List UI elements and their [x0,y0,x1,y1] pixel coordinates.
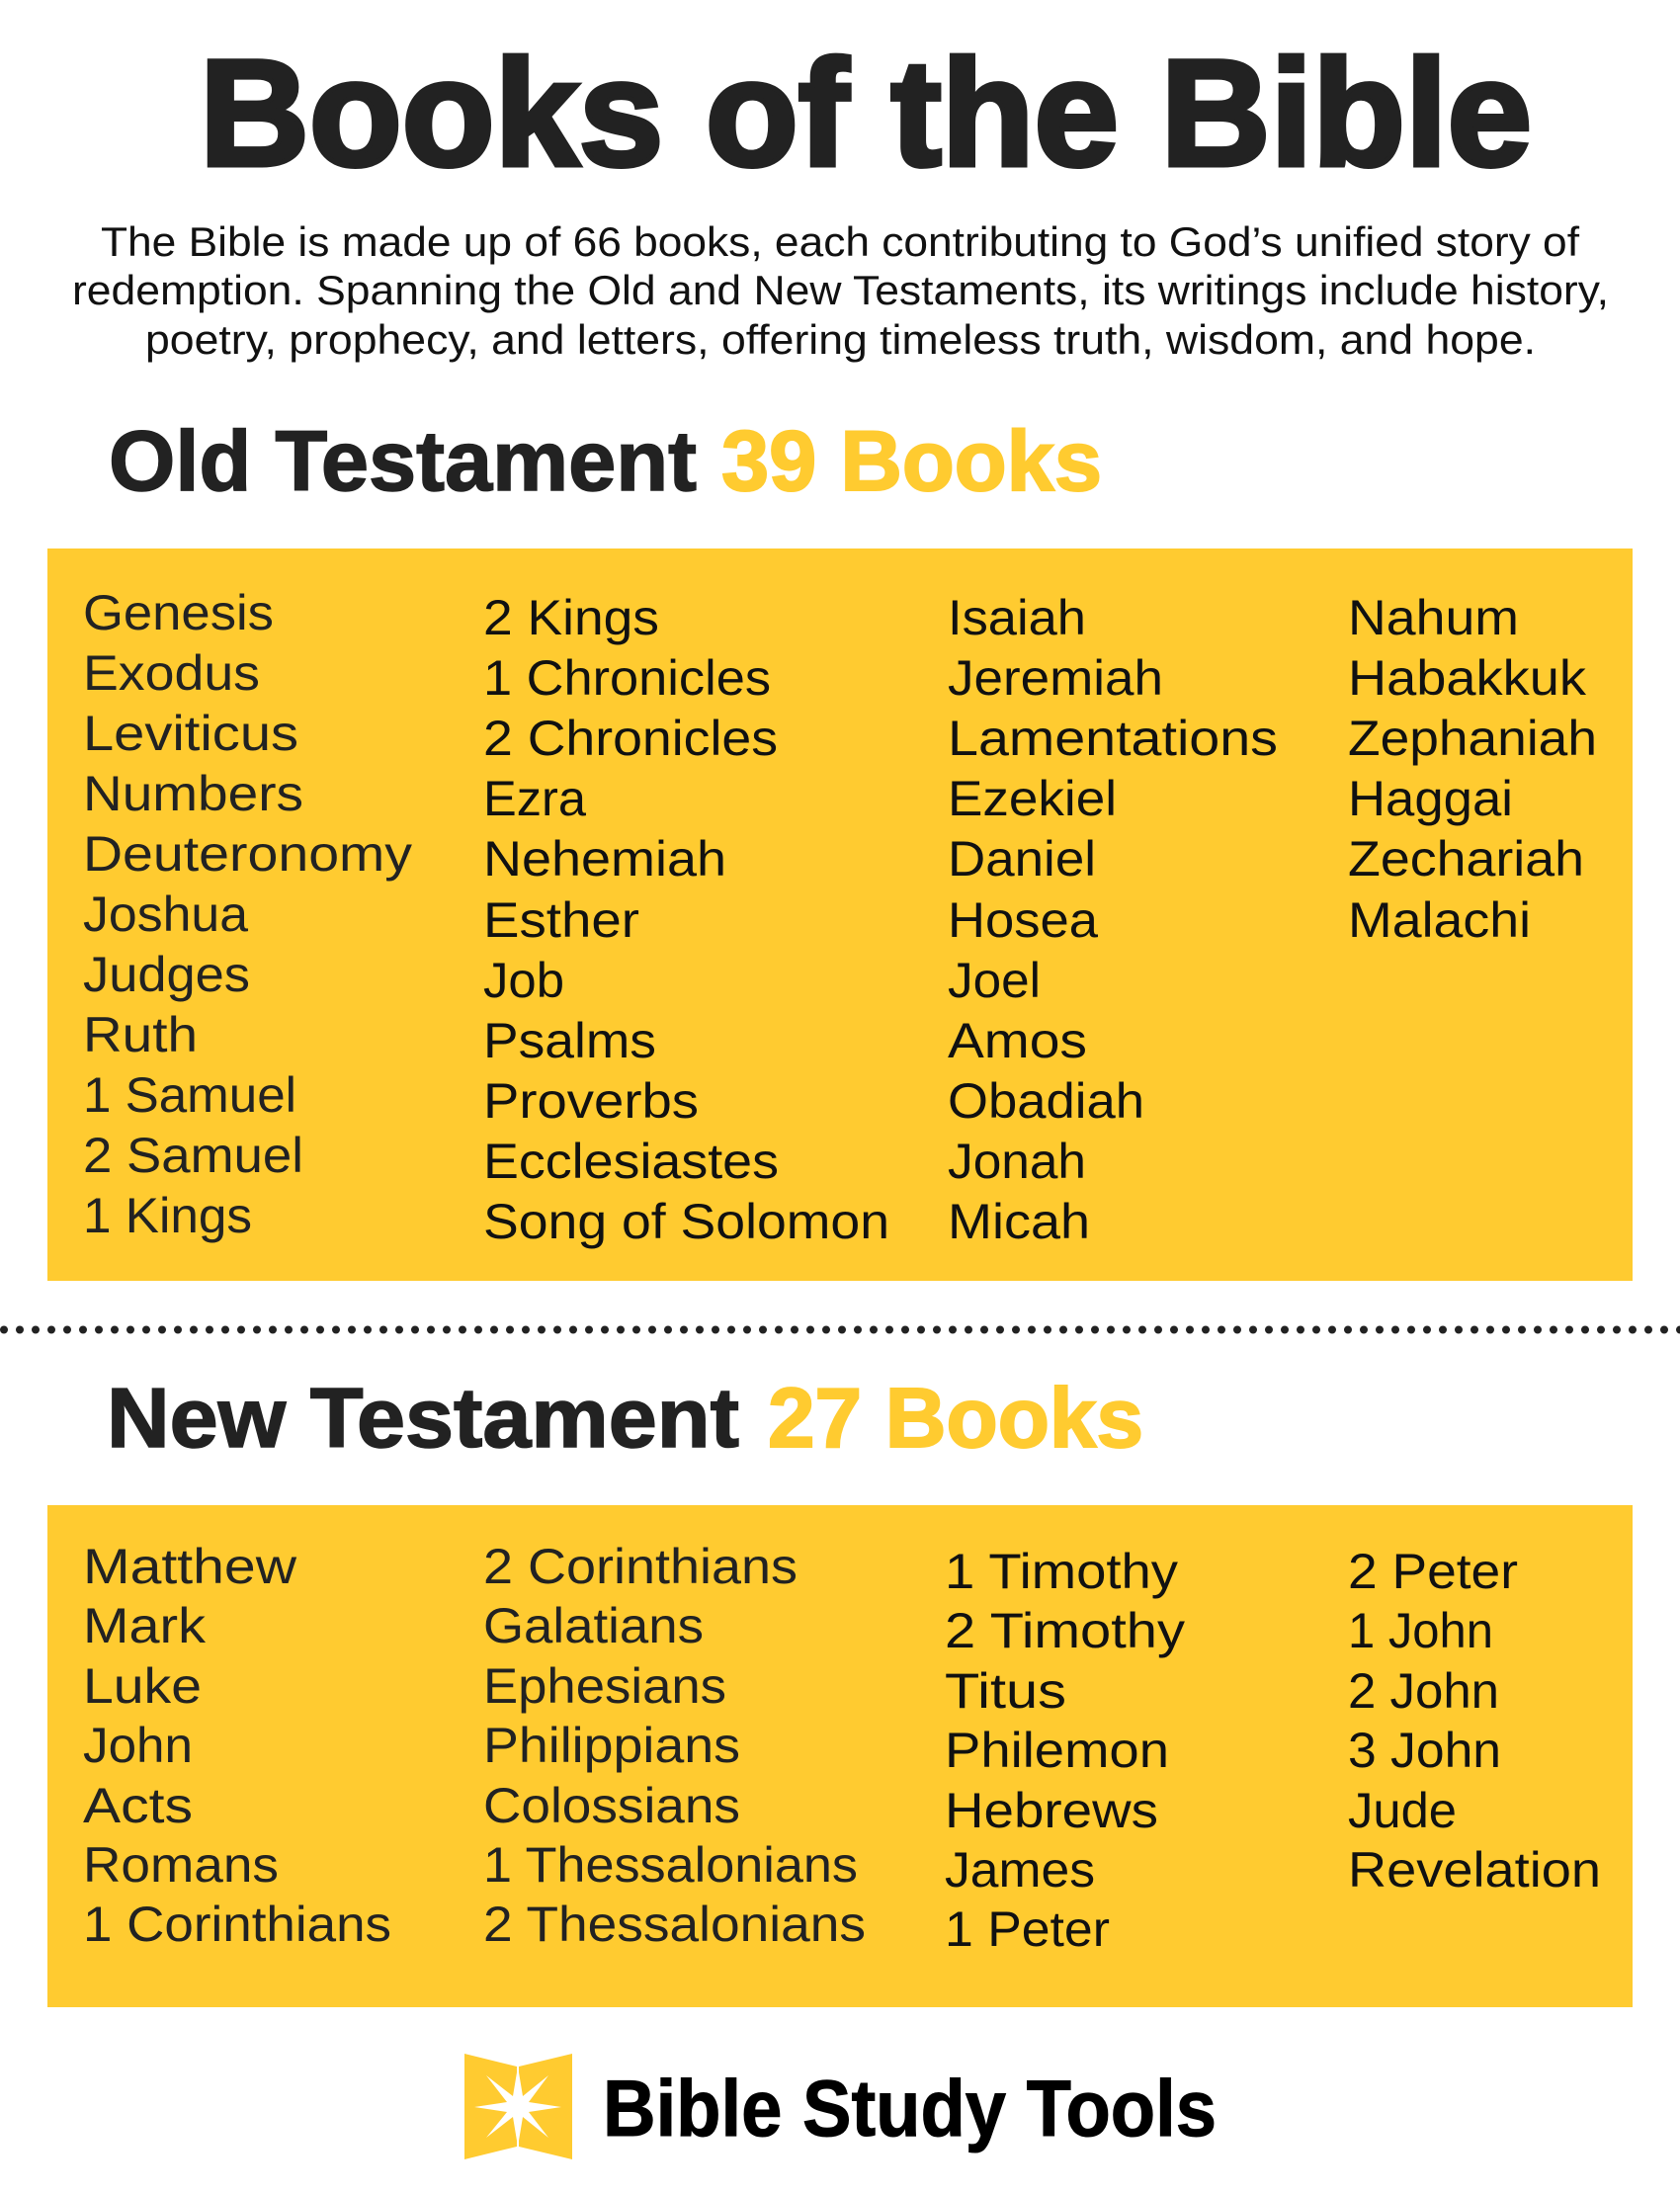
column: 2 Corinthians to 2 Thessalonians: 2 Corinthians [483,1539,798,1594]
column: Isaiah to Micah: Daniel [948,831,1096,886]
heading: Old Testament 39 Books [109,414,1102,509]
column: 1 Timothy to 1 Peter [945,1544,1185,1957]
column: Genesis to 1 Kings [83,585,412,1243]
heading: New Testament 27 Books: New Testament [107,1372,739,1466]
column: 2 Kings to Song of Solomon: Job [483,953,564,1008]
column: 2 Kings to Song of Solomon: Song of Solomon [483,1194,889,1249]
column: 1 Timothy to 1 Peter: Titus [945,1663,1066,1719]
column: 2 Peter to Revelation: 1 John [1348,1603,1493,1658]
column: Isaiah to Micah: Obadiah [948,1073,1144,1129]
column: 2 Peter to Revelation: 2 John [1348,1663,1499,1719]
column: Matthew to 1 Corinthians: Acts [83,1778,193,1833]
column: 2 Peter to Revelation: 2 Peter [1348,1544,1518,1599]
column: 2 Corinthians to 2 Thessalonians [483,1539,866,1952]
title: Books of the Bible [200,29,1532,198]
column: Genesis to 1 Kings: Numbers [83,766,303,821]
column: 2 Kings to Song of Solomon: Psalms [483,1013,656,1068]
column: 2 Kings to Song of Solomon: Ecclesiastes [483,1134,779,1189]
column: Isaiah to Micah: Hosea [948,892,1098,948]
column: Nahum to Malachi: Habakkuk [1348,650,1587,706]
column: Matthew to 1 Corinthians: Luke [83,1658,202,1714]
column: Genesis to 1 Kings: Leviticus [83,706,298,761]
column: Genesis to 1 Kings: Deuteronomy [83,826,412,882]
column: 2 Kings to Song of Solomon: Proverbs [483,1073,699,1129]
column: 2 Corinthians to 2 Thessalonians: Colossians [483,1778,740,1833]
column: Isaiah to Micah: Joel [948,953,1041,1008]
column: Isaiah to Micah [948,590,1278,1249]
column: Matthew to 1 Corinthians: Romans [83,1837,279,1893]
column: Nahum to Malachi: Malachi [1348,892,1531,948]
column: 2 Corinthians to 2 Thessalonians: 1 Thessalonians [483,1837,858,1893]
heading: New Testament 27 Books [107,1372,1143,1466]
column: 1 Timothy to 1 Peter: 2 Timothy [945,1603,1185,1658]
heading: New Testament 27 Books: 27 Books [768,1372,1143,1466]
panel: New Testament books [47,1505,1633,2007]
column: Genesis to 1 Kings: Joshua [83,886,248,942]
column: 2 Corinthians to 2 Thessalonians: 2 Thessalonians [483,1897,866,1952]
column: Nahum to Malachi: Zechariah [1348,831,1584,886]
column: Isaiah to Micah: Amos [948,1013,1087,1068]
column: 1 Timothy to 1 Peter: James [945,1842,1095,1898]
column: Genesis to 1 Kings: 1 Samuel [83,1067,296,1123]
column: Genesis to 1 Kings: Judges [83,947,250,1002]
column: 2 Peter to Revelation: Revelation [1348,1842,1601,1898]
column: Isaiah to Micah: Isaiah [948,590,1086,645]
icon: open book with star [464,2054,572,2159]
column: 2 Kings to Song of Solomon: Esther [483,892,639,948]
column: Matthew to 1 Corinthians: Mark [83,1598,207,1653]
column: 2 Kings to Song of Solomon: 1 Chronicles [483,650,771,706]
logo wordmark: Bible Study Tools [603,2065,1217,2153]
column: Genesis to 1 Kings: Ruth [83,1007,198,1062]
column: 1 Timothy to 1 Peter: 1 Timothy [945,1544,1178,1599]
intro text block: poetry, prophecy, and letters, offering timeless truth, wisdom, and hope. [145,316,1536,363]
column: 2 Kings to Song of Solomon: Nehemiah [483,831,726,886]
column: 2 Corinthians to 2 Thessalonians: Galatians [483,1598,704,1653]
column: Matthew to 1 Corinthians: 1 Corinthians [83,1897,391,1952]
column: 2 Peter to Revelation: Jude [1348,1783,1457,1838]
column: Matthew to 1 Corinthians: John [83,1718,193,1773]
column: 2 Kings to Song of Solomon [483,590,889,1249]
column: 2 Corinthians to 2 Thessalonians: Philippians [483,1718,740,1773]
column: 1 Timothy to 1 Peter: Hebrews [945,1783,1158,1838]
column: Genesis to 1 Kings: Exodus [83,645,260,701]
column: Genesis to 1 Kings: 2 Samuel [83,1128,303,1183]
column: Isaiah to Micah: Jonah [948,1134,1086,1189]
column: 2 Peter to Revelation: 3 John [1348,1723,1501,1778]
column: Matthew to 1 Corinthians [83,1539,391,1952]
column: 1 Timothy to 1 Peter: 1 Peter [945,1901,1110,1957]
heading: Old Testament 39 Books: Old Testament [109,414,697,509]
intro text block [72,218,1609,363]
column: 2 Kings to Song of Solomon: Ezra [483,771,586,826]
heading: Old Testament 39 Books: 39 Books [721,414,1102,509]
column: Nahum to Malachi: Zephaniah [1348,711,1597,766]
column: 2 Peter to Revelation [1348,1544,1601,1898]
column: Isaiah to Micah: Micah [948,1194,1090,1249]
column: Isaiah to Micah: Ezekiel [948,771,1117,826]
column: Genesis to 1 Kings: Genesis [83,585,274,640]
intro text block: The Bible is made up of 66 books, each contributing to God’s unified story of [101,218,1579,265]
column: 1 Timothy to 1 Peter: Philemon [945,1723,1169,1778]
column: Nahum to Malachi [1348,590,1597,948]
column: Isaiah to Micah: Lamentations [948,711,1278,766]
logo: Bible Study Tools [464,2054,1217,2159]
column: Nahum to Malachi: Nahum [1348,590,1519,645]
column: Isaiah to Micah: Jeremiah [948,650,1163,706]
column: Nahum to Malachi: Haggai [1348,771,1513,826]
panel: Old Testament books [47,548,1633,1281]
column: 2 Corinthians to 2 Thessalonians: Ephesians [483,1658,726,1714]
column: Genesis to 1 Kings: 1 Kings [83,1188,252,1243]
column: 2 Kings to Song of Solomon: 2 Chronicles [483,711,778,766]
intro text block: redemption. Spanning the Old and New Testaments, its writings include history, [72,267,1609,313]
column: 2 Kings to Song of Solomon: 2 Kings [483,590,659,645]
column: Matthew to 1 Corinthians: Matthew [83,1539,297,1594]
